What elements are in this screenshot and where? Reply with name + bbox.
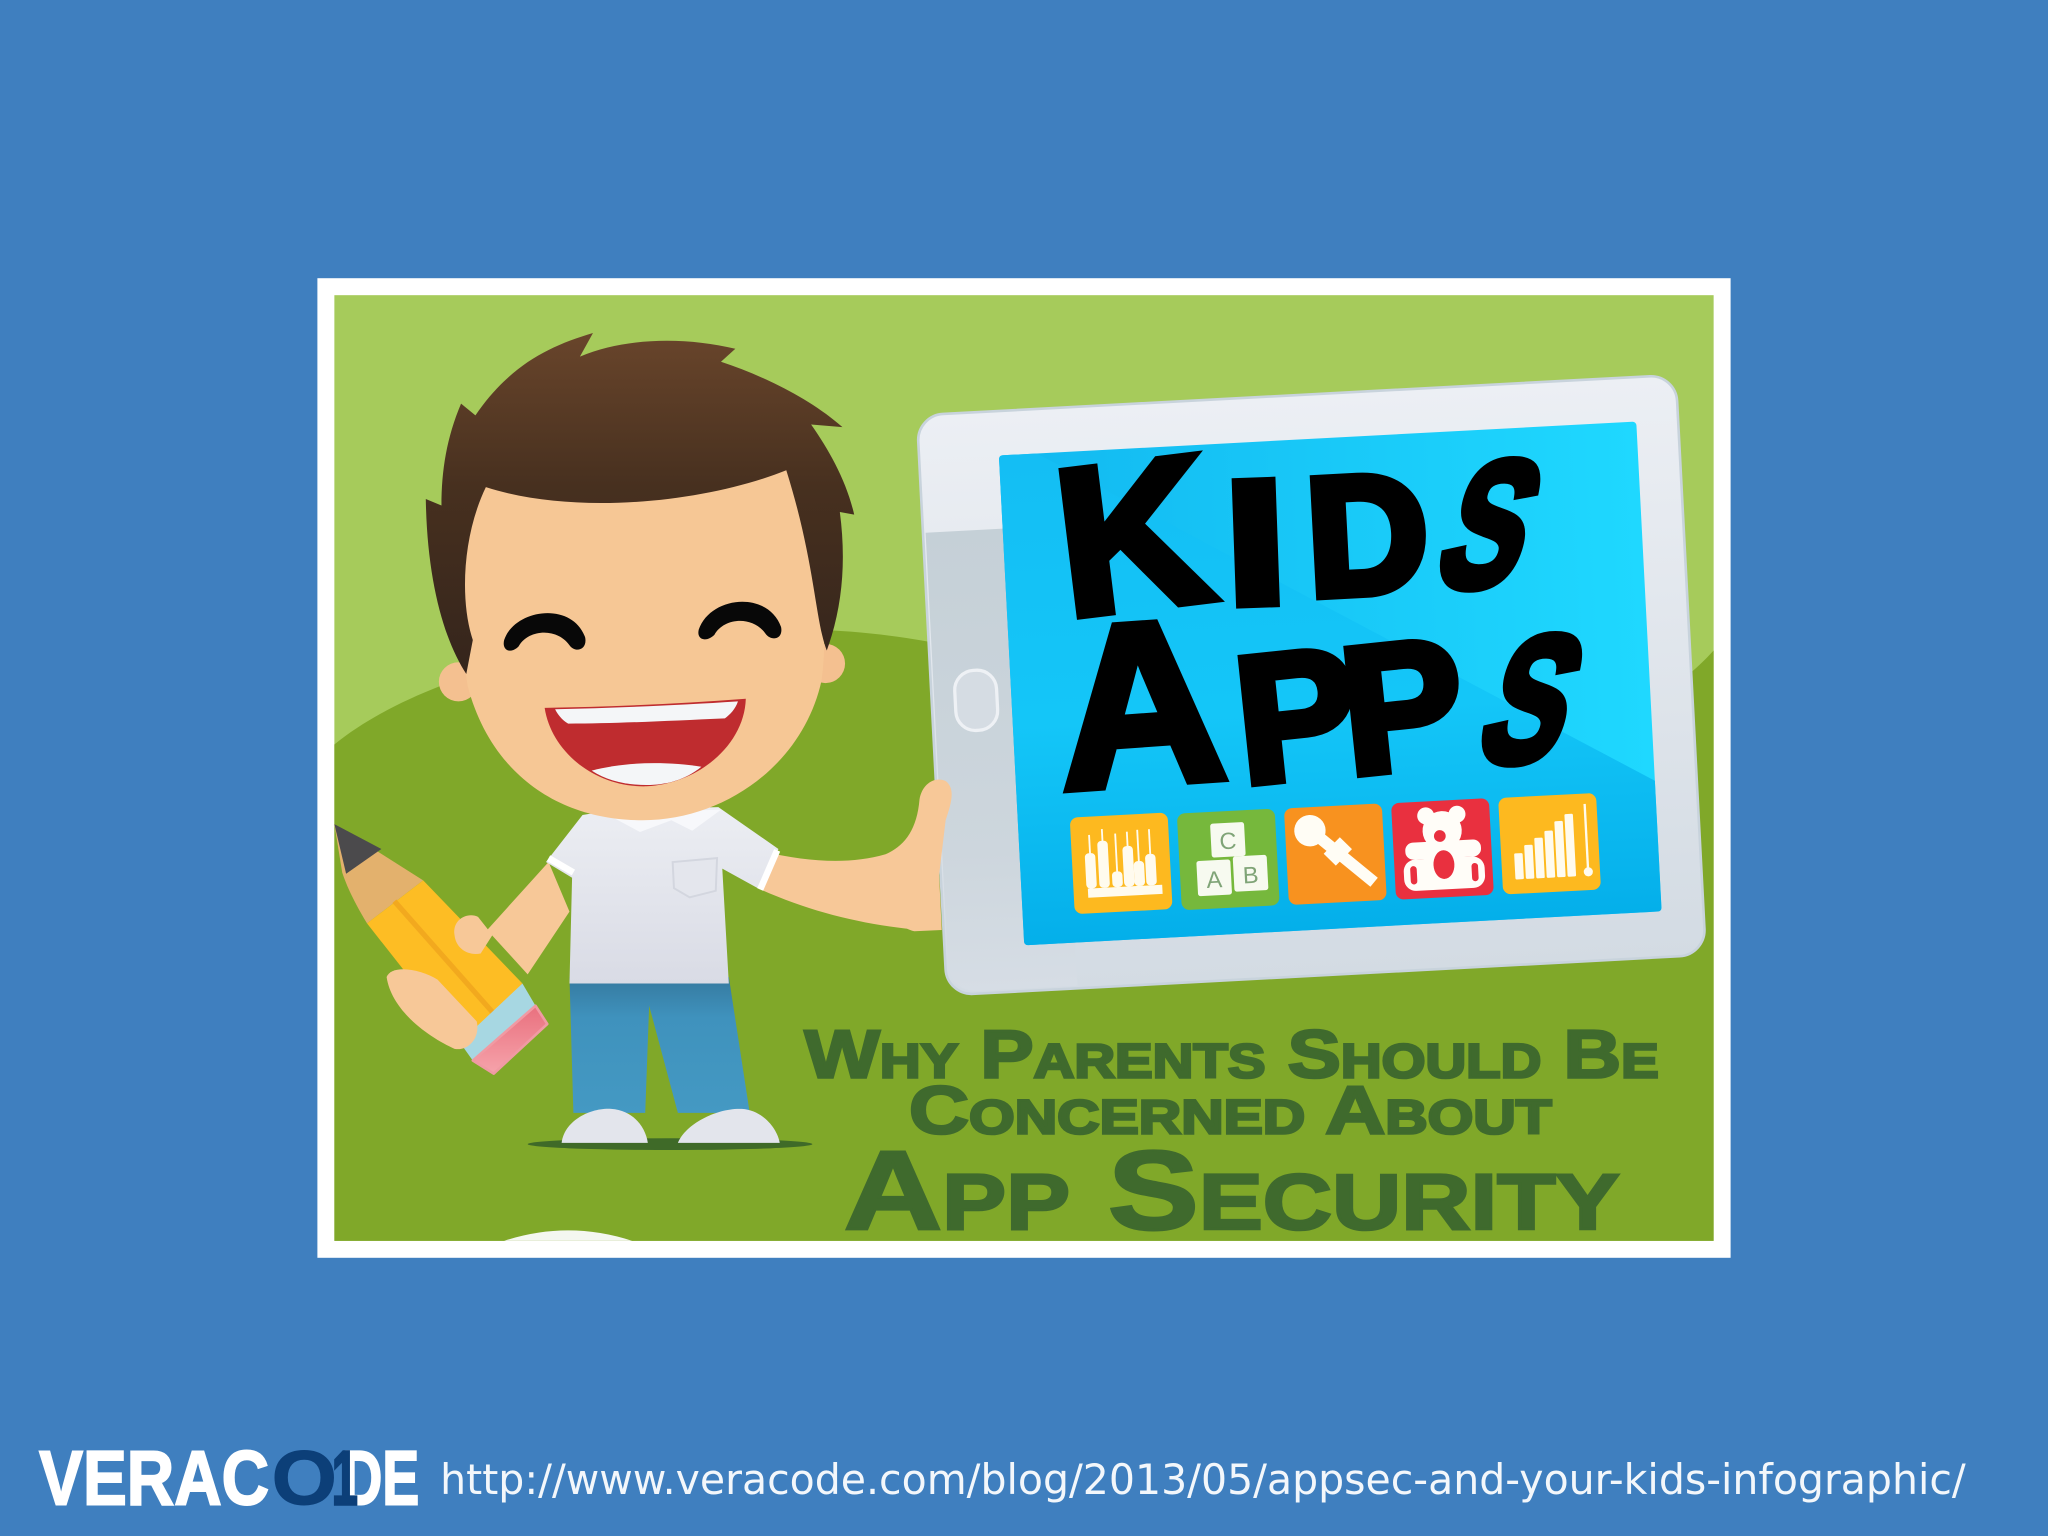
Veracode logo: O: [272, 1436, 337, 1522]
hand holding tablet: [882, 779, 952, 931]
pencil wood: [334, 824, 423, 923]
tablet body: [917, 375, 1706, 995]
app icons row: [1070, 793, 1601, 914]
lower hand: [387, 969, 477, 1049]
word: Apps: A: [1049, 570, 1232, 838]
screen lower shade: [999, 422, 1662, 945]
right ear: [806, 644, 845, 683]
pencil and hand: [334, 824, 547, 1074]
icon: alphabet blocks: B: [1242, 862, 1259, 888]
tablet: [917, 375, 1706, 995]
word: Apps: P: [1226, 610, 1367, 822]
sleeve cuffs: [549, 850, 777, 889]
left arm: [487, 862, 569, 974]
line 2: Concerned About: [909, 1074, 1552, 1149]
Veracode logo: DE: [342, 1436, 419, 1522]
right shoe: [678, 1109, 780, 1143]
pencil eraser: [473, 1006, 547, 1074]
icon: abacus: [1070, 813, 1173, 914]
word: Kids: [1044, 411, 1565, 661]
top teeth: [555, 701, 738, 724]
collar: [603, 810, 721, 832]
Veracode logo: VERAC: [39, 1436, 269, 1522]
icon: teddy bear: [1391, 798, 1494, 900]
picture panel: [334, 295, 1714, 1253]
pencil ferrule: [460, 984, 536, 1061]
finger over pencil: [454, 915, 492, 954]
title: Kids Apps: [1044, 411, 1607, 838]
word: Kids: K: [1044, 411, 1222, 661]
right arm: [758, 852, 920, 930]
Veracode logo: 1: [332, 1436, 358, 1522]
ground shadow: [528, 1138, 812, 1150]
icon: alphabet blocks: A: [1206, 866, 1223, 893]
shirt pocket: [673, 858, 717, 897]
sky: [334, 295, 1714, 1241]
home button: [954, 669, 999, 731]
word: Apps: P: [1332, 601, 1473, 813]
pencil highlight: [394, 901, 494, 1014]
icon: alphabet blocks: C: [1219, 828, 1237, 854]
left eye: [504, 613, 585, 651]
tablet shaded left side: [926, 526, 1077, 993]
word: Kids: D: [1302, 439, 1432, 632]
mouth: [545, 699, 746, 786]
left shoe: [562, 1109, 648, 1143]
white picture frame: [317, 278, 1731, 1258]
pencil lead: [334, 824, 381, 874]
hair: [426, 333, 854, 674]
left ear: [439, 662, 478, 701]
white mound at bottom edge: [504, 1230, 632, 1241]
line 3: App Security: [844, 1127, 1620, 1253]
face: [461, 468, 824, 820]
icon: alphabet blocks: [1177, 809, 1280, 910]
green hill: [334, 629, 1714, 1241]
right eye: [698, 602, 781, 639]
source url: http://www.veracode.com/blog/2013/05/appsec-and-your-kids-infographic/: [440, 1455, 1967, 1504]
subtitle: [805, 1018, 1659, 1253]
word: Apps: [1049, 570, 1607, 838]
word: Kids: I: [1231, 453, 1281, 632]
trousers: [569, 977, 750, 1113]
icon: rattle: [1284, 803, 1387, 905]
shirt: [546, 807, 778, 984]
screen: [999, 422, 1662, 945]
word: Apps: S: [1460, 599, 1607, 800]
bottom teeth: [592, 763, 701, 785]
word: Kids: S: [1418, 424, 1565, 625]
line 1: Why Parents Should Be: [805, 1018, 1659, 1093]
icon: xylophone: [1498, 793, 1601, 895]
boy character: [426, 333, 920, 1143]
pencil body: [367, 880, 522, 1046]
